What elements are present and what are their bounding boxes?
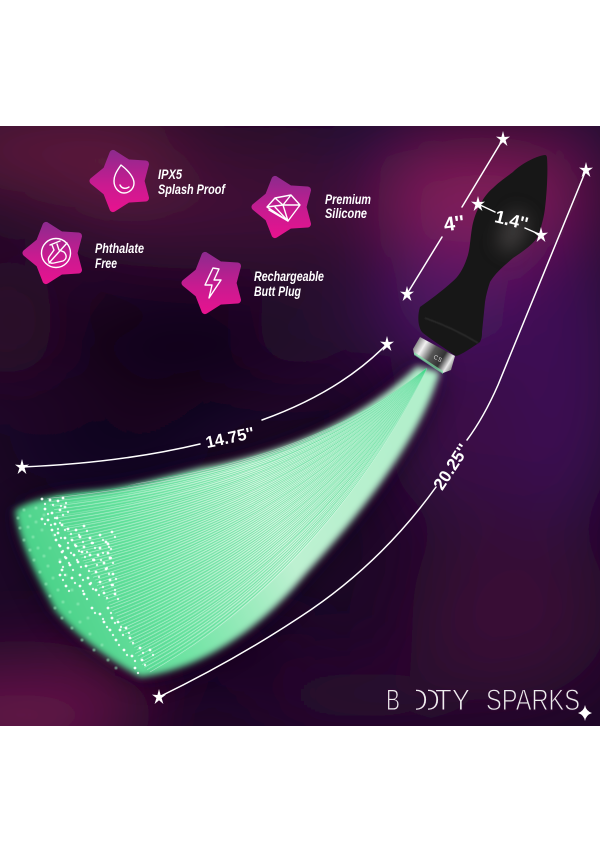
icon: water drop xyxy=(114,165,134,193)
badge: rechargeable: Rechargeable xyxy=(254,269,324,284)
badge: premium silicone xyxy=(255,179,371,235)
badge: phthalate free: Phthalate xyxy=(95,241,144,256)
dimension: 20.25 inch total length xyxy=(152,162,593,704)
plug body xyxy=(413,155,547,374)
dimension: 20.25 inch total length: 20.25'' xyxy=(430,441,473,493)
badge: IPX5 splash proof: Splash Proof xyxy=(158,182,226,197)
dimension: 1.4 inch width xyxy=(471,196,548,242)
metal collar xyxy=(413,337,455,374)
badge: IPX5 splash proof xyxy=(93,153,226,209)
logo: Booty Sparks xyxy=(388,689,592,721)
dimension: 14.75 inch tail length xyxy=(15,336,394,474)
badge: phthalate free: Free xyxy=(95,256,117,271)
logo: Booty Sparks: O xyxy=(405,684,428,717)
dimension: 14.75 inch tail length: 14.75'' xyxy=(204,424,256,452)
icon: lightning bolt xyxy=(205,268,221,298)
dimension: 4 inch length: 4'' xyxy=(442,212,466,236)
logo: Booty Sparks: TY xyxy=(435,684,470,717)
badge: rechargeable xyxy=(185,255,324,311)
dimension: 4 inch length xyxy=(400,131,510,301)
background panel xyxy=(0,126,600,726)
badge: phthalate free xyxy=(26,225,144,281)
badge: rechargeable: Butt Plug xyxy=(254,284,302,299)
logo: Booty Sparks: B xyxy=(386,684,400,717)
icon: crossed flask xyxy=(42,238,70,268)
badge: premium silicone: Premium xyxy=(325,192,371,207)
fiber optic tail xyxy=(15,356,440,677)
metal collar: C S xyxy=(432,355,443,364)
logo: Booty Sparks: O xyxy=(417,684,440,717)
icon: diamond xyxy=(267,195,300,221)
badge: IPX5 splash proof: IPX5 xyxy=(158,167,182,182)
badge: premium silicone: Silicone xyxy=(325,206,367,221)
dimension: 1.4 inch width: 1.4'' xyxy=(493,206,530,234)
